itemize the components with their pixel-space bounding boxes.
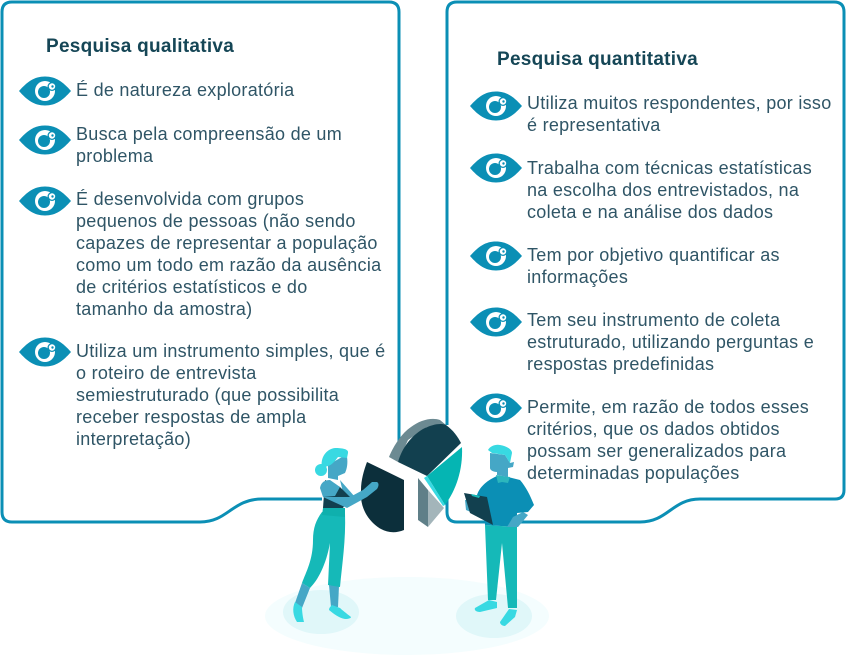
text: qualitative 2: problema <box>76 146 153 166</box>
panel: quantitative outline <box>447 2 844 522</box>
panel: qualitative outline <box>2 2 399 522</box>
text: quantitative 4: respostas predefinidas <box>527 354 714 374</box>
text: quantitative 5: critérios, que os dados obtidos <box>527 419 780 439</box>
text: quantitative 1: Utiliza muitos respondentes, por isso <box>527 93 832 113</box>
text: quantitative 3: Tem por objetivo quantificar as <box>527 245 780 265</box>
text: qualitative 4: Utiliza um instrumento simples, que é <box>76 341 385 361</box>
text: quantitative 1 <box>527 93 832 135</box>
text: quantitative 3: informações <box>527 267 628 287</box>
text: qualitative 4 <box>76 341 385 449</box>
floor ellipses <box>265 577 549 655</box>
illustration: man <box>464 445 534 626</box>
text: qualitative 4: semiestruturado (que possibilita <box>76 385 339 405</box>
icon: eye 3 <box>19 186 71 216</box>
text: quantitative 2: Trabalha com técnicas estatísticas <box>527 158 812 178</box>
icon: eye 5 <box>470 92 522 120</box>
heading: qualitative: Pesquisa qualitativa <box>46 36 234 57</box>
text: quantitative 5 <box>527 397 809 483</box>
text: quantitative 2: coleta e na análise dos dados <box>527 202 773 222</box>
text: qualitative 4: receber respostas de ampla <box>76 407 306 427</box>
illustration: woman <box>293 448 378 622</box>
text: quantitative 4: estruturado, utilizando perguntas e <box>527 332 814 352</box>
text: quantitative 4: Tem seu instrumento de coleta <box>527 310 780 330</box>
text: quantitative 3 <box>527 245 780 287</box>
text: qualitative 1: É de natureza exploratória <box>76 80 294 100</box>
text: qualitative 3 <box>76 189 382 319</box>
text: qualitative 4: interpretação) <box>76 429 191 449</box>
text: qualitative 3: pequenos de pessoas (não sendo <box>76 211 356 231</box>
illustration: pie chart pieces <box>361 419 462 532</box>
icon: eye 9 <box>470 394 522 422</box>
icon: eye 1 <box>19 76 71 106</box>
text: qualitative 3: capazes de representar a população <box>76 233 378 253</box>
text: qualitative 3: como um todo em razão da ausência <box>76 255 381 275</box>
icon: eye 8 <box>470 308 522 336</box>
icon: eye 6 <box>470 154 522 182</box>
text: quantitative 1: é representativa <box>527 115 661 135</box>
text: quantitative 5: Permite, em razão de todos esses <box>527 397 809 417</box>
text: quantitative 4 <box>527 310 814 374</box>
heading: quantitative: Pesquisa quantitativa <box>497 49 698 70</box>
text: qualitative 3: tamanho da amostra) <box>76 299 252 319</box>
text: qualitative 3: de critérios estatísticos e do <box>76 277 308 297</box>
text: quantitative 2: na escolha dos entrevistados, na <box>527 180 799 200</box>
text: quantitative 2 <box>527 158 812 222</box>
icon: eye 4 <box>19 338 71 366</box>
text: qualitative 2 <box>76 124 342 166</box>
icon: eye 2 <box>19 126 71 154</box>
icon: eye 7 <box>470 242 522 270</box>
text: qualitative 3: É desenvolvida com grupos <box>76 189 304 209</box>
text: quantitative 5: possam ser generalizados para <box>527 441 786 461</box>
text: qualitative 2: Busca pela compreensão de um <box>76 124 342 144</box>
text: qualitative 4: o roteiro de entrevista <box>76 363 257 383</box>
text: quantitative 5: determinadas populações <box>527 463 740 483</box>
